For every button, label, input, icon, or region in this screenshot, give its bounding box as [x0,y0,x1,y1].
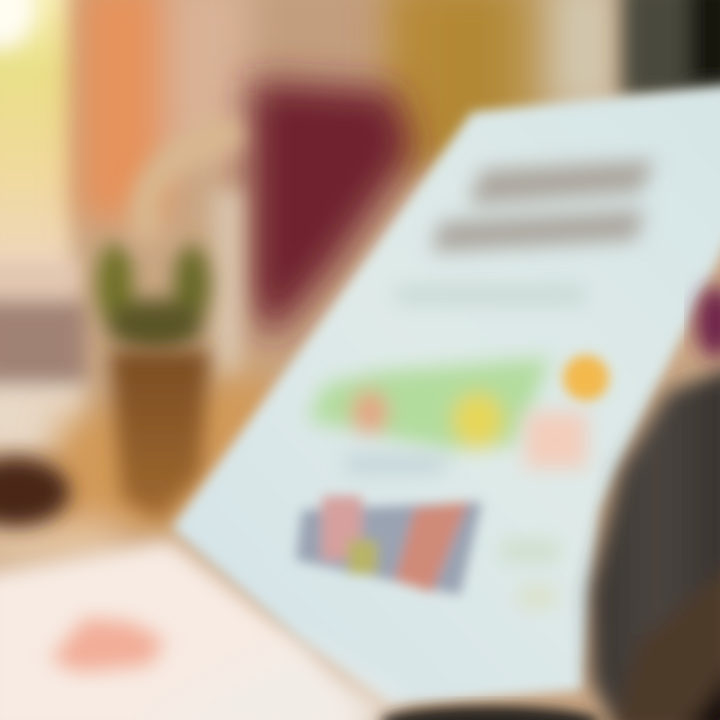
burgundy chair [250,80,415,340]
bar chart [296,496,482,595]
wooden table [0,370,280,561]
faint lines on page [345,285,585,606]
report page [172,85,720,705]
orange curtain [78,0,390,220]
bottom-left papers [0,540,370,720]
orange circle icon [563,355,609,401]
dark foreground shape at bottom [380,706,600,720]
lower page highlight [130,645,400,720]
pink callout [525,412,587,468]
window sill and left wall [0,190,242,450]
dark object on the left [0,458,70,526]
plant [97,130,240,351]
dark binder on the right [590,365,720,720]
plant stem [144,130,240,240]
red note on papers [50,618,165,672]
green chart [308,358,550,450]
burgundy accent on the right [696,286,720,358]
plant pot [110,350,210,520]
plant leaves [97,243,133,327]
dark top-right corner [622,0,720,100]
golden curtain [385,0,618,170]
window glow [0,0,72,280]
report title [432,160,655,252]
